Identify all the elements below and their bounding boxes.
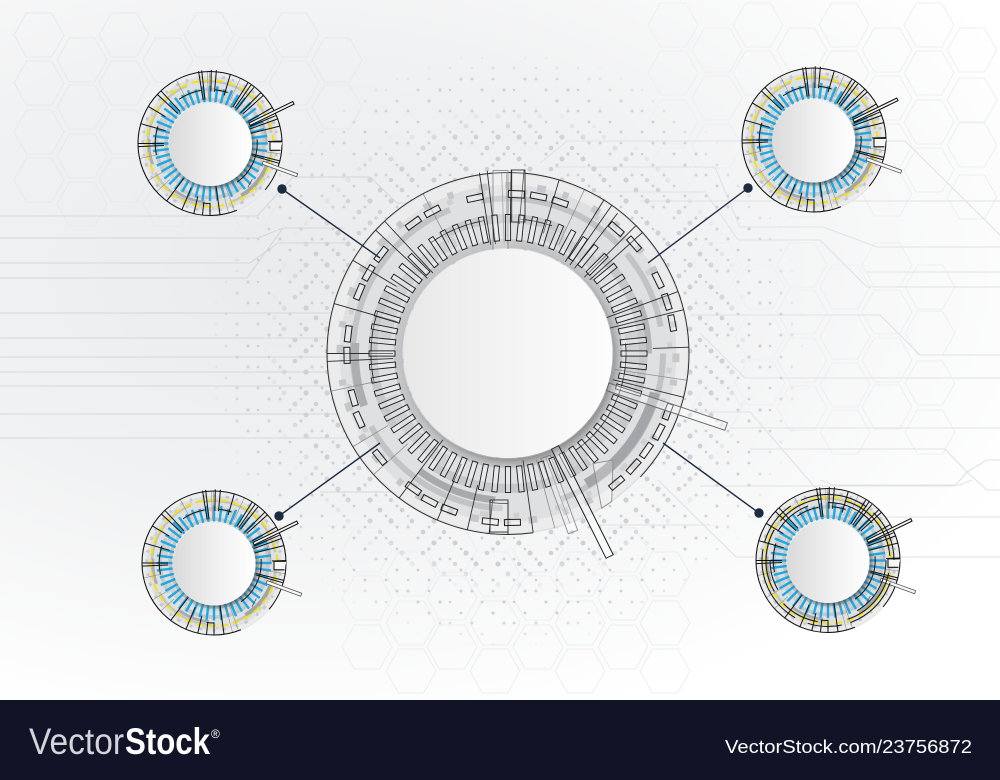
protruding bar: bottom bbox=[551, 446, 613, 558]
outer arc of main ring bbox=[327, 172, 689, 534]
sector boxes of main ring bbox=[490, 170, 613, 534]
halftone dots: small bbox=[216, 58, 802, 644]
main white disc bbox=[404, 249, 612, 458]
white disc bbox=[772, 100, 855, 182]
ring artwork bbox=[123, 56, 298, 231]
hexagon grid: top right bbox=[648, 3, 997, 219]
hexagon grid: bottom centre bbox=[342, 528, 690, 693]
tangential dash rectangles of main ring bbox=[344, 190, 677, 526]
small ring: bottom left bbox=[127, 476, 302, 650]
gray radial lines of main ring bbox=[331, 173, 687, 528]
connector: top right bbox=[648, 183, 753, 263]
stepped black arcs bbox=[743, 476, 913, 645]
connector: bottom left bbox=[274, 443, 380, 521]
VectorStock logo wordmark: Vector bbox=[29, 721, 124, 762]
image id text: VectorStock.com/23756872 bbox=[725, 737, 972, 757]
VectorStock logo wordmark: ® bbox=[211, 727, 220, 741]
ring artwork bbox=[741, 473, 916, 648]
VectorStock logo wordmark: Stock bbox=[125, 721, 210, 762]
radial tick marks of main ring bbox=[346, 191, 670, 516]
connector: top left bbox=[277, 184, 380, 258]
halftone dots: large bbox=[272, 114, 745, 588]
black radial lines and arcs of main ring bbox=[320, 165, 696, 542]
white disc bbox=[169, 103, 252, 186]
circuit lines: left bbox=[0, 177, 480, 492]
white disc bbox=[172, 522, 256, 606]
ring artwork bbox=[727, 53, 902, 227]
small ring: bottom right bbox=[741, 473, 916, 648]
white disc bbox=[786, 520, 870, 603]
VectorStock logo wordmark bbox=[29, 721, 220, 762]
hexagon grid: mid right bbox=[692, 243, 955, 454]
footer bar bbox=[0, 700, 1000, 780]
ring artwork bbox=[127, 476, 302, 650]
small ring: top right bbox=[727, 53, 902, 227]
hexagon grid: top left bbox=[14, 13, 362, 226]
gray bands of main ring bbox=[290, 135, 726, 572]
main central ring bbox=[290, 135, 727, 572]
protruding bar: lower right bbox=[606, 383, 727, 430]
circuit lines: right bbox=[540, 141, 1000, 557]
connector: bottom right bbox=[663, 443, 764, 518]
small ring: top left bbox=[123, 56, 298, 231]
